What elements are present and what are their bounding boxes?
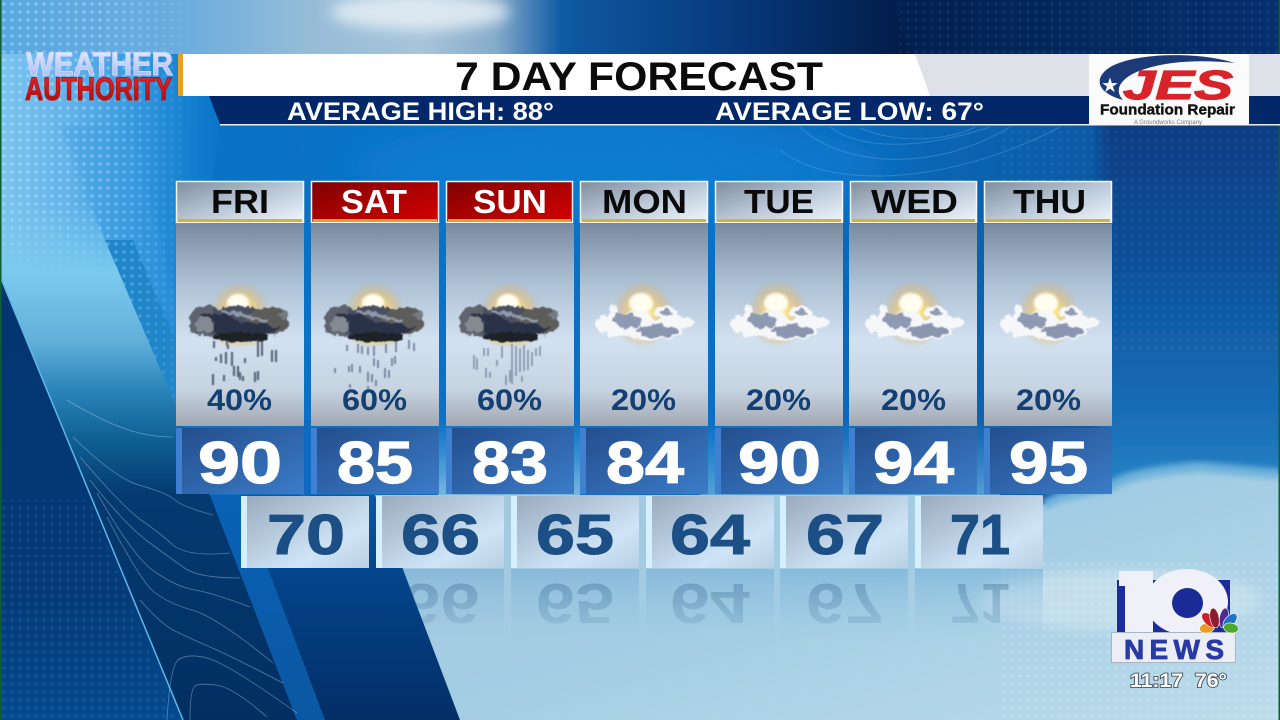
conditions panel: [715, 224, 843, 426]
average low: AVERAGE LOW: 67°: [715, 98, 984, 126]
reflection of low temperatures: [402, 569, 1043, 624]
low 64: 64: [670, 503, 750, 567]
numeral 10: 1: [1126, 558, 1152, 647]
low temperature row: [241, 496, 1043, 568]
conditions panel: 20%: [611, 384, 676, 417]
day header: [176, 182, 304, 222]
day header: [312, 182, 438, 222]
reflection of low temperatures: 71: [950, 571, 1010, 635]
high temperature: 83: [472, 430, 548, 496]
low 67: 67: [806, 503, 884, 567]
banner grey end: [900, 54, 1280, 96]
low 70: [241, 496, 369, 568]
high temperature: [849, 428, 977, 496]
high temperature: 84: [606, 430, 684, 496]
conditions panel: 20%: [881, 384, 946, 417]
forecast column: WED: [849, 182, 977, 496]
forecast column: FRI: [176, 182, 304, 496]
low 70: 70: [267, 503, 345, 567]
conditions panel: [849, 224, 977, 426]
swoosh with star: [1100, 55, 1235, 100]
centre of zero: [1172, 588, 1203, 618]
forecast column: SAT: [311, 182, 439, 496]
low 67: [780, 496, 908, 568]
low 71: [915, 496, 1043, 568]
numeral 10: 0: [1150, 558, 1224, 647]
day header: WED: [871, 183, 958, 220]
reflection of low temperatures: 64: [670, 571, 750, 635]
low 66: [376, 496, 504, 568]
forecast column: TUE: [715, 182, 843, 496]
day header: THU: [1013, 183, 1086, 220]
conditions panel: 60%: [477, 384, 542, 417]
high temperature: 95: [1009, 430, 1088, 496]
subtitle bar: [209, 96, 1280, 124]
news word: NEWS: [1124, 634, 1224, 665]
title banner: [178, 54, 1280, 126]
high temperature: [176, 428, 304, 496]
news plate: [1112, 632, 1236, 662]
authority word: AUTHORITY: [25, 71, 172, 107]
day header: MON: [602, 183, 687, 220]
day header: [580, 182, 708, 222]
icon: peacock: [1199, 607, 1240, 634]
conditions panel: [984, 224, 1112, 426]
reflection of low temperatures: 67: [806, 571, 884, 635]
day header: TUE: [744, 183, 814, 220]
foundation repair: Foundation Repair: [1100, 102, 1235, 118]
high temperature: 90: [738, 430, 821, 496]
low 64: [646, 496, 774, 568]
title: 7 DAY FORECAST: [455, 55, 823, 99]
conditions panel: [311, 224, 439, 426]
forecast column: MON: [580, 182, 708, 496]
low 65: [511, 496, 639, 568]
JES letters: JES: [1123, 62, 1233, 108]
conditions panel: [176, 224, 304, 426]
day header: SAT: [341, 183, 407, 220]
reflection of low temperatures: 65: [536, 571, 614, 635]
high temperature: [580, 428, 708, 496]
low 65: 65: [536, 503, 614, 567]
conditions panel: 20%: [746, 384, 811, 417]
day header: [446, 182, 572, 222]
conditions panel: [446, 224, 574, 426]
day header: [716, 182, 842, 222]
reflection of low temperatures: 66: [401, 571, 480, 635]
conditions panel: [580, 224, 708, 426]
average high: AVERAGE HIGH: 88°: [287, 98, 554, 126]
star: ★: [1101, 73, 1119, 97]
high temperature: 85: [337, 430, 413, 496]
company line: A Groundworks Company: [1134, 119, 1203, 126]
day header: SUN: [473, 183, 547, 220]
forecast column: THU: [984, 182, 1112, 496]
high temperature: 94: [873, 430, 954, 496]
forecast column: SUN: [446, 182, 574, 496]
orange accent bar: [178, 54, 183, 96]
station logo: 10 News: [1112, 558, 1240, 692]
weather word: WEATHER: [26, 46, 173, 82]
numeral 10: [1119, 558, 1228, 647]
day header: [850, 182, 976, 222]
high temperature: [311, 428, 439, 496]
sponsor logo: JES Foundation Repair: [1089, 54, 1249, 126]
banner white: [183, 54, 930, 96]
low 66: 66: [401, 503, 480, 567]
conditions panel: 60%: [342, 384, 407, 417]
low 71: 71: [950, 503, 1010, 567]
conditions panel: 20%: [1016, 384, 1081, 417]
blue backing: [1117, 580, 1230, 634]
high temperature: [446, 428, 574, 496]
high temperature: [715, 428, 843, 496]
conditions panel: 40%: [207, 384, 272, 417]
day header: [984, 182, 1112, 222]
high temperature: 90: [198, 430, 282, 496]
time and temperature: 11:17 76°: [1130, 671, 1227, 692]
day header: FRI: [211, 183, 269, 220]
weather authority logo: [25, 46, 173, 107]
high temperature: [984, 428, 1112, 496]
